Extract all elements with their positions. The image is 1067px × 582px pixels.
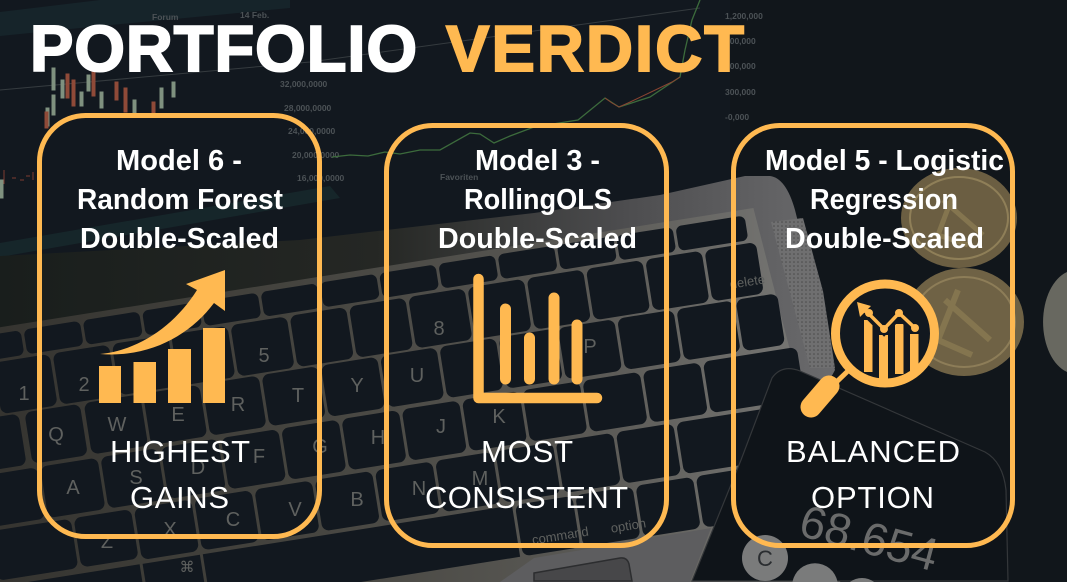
- trackpad: [534, 558, 632, 581]
- keyboard well: [0, 208, 846, 582]
- key letters: R: [231, 394, 245, 416]
- phone: [692, 369, 1008, 581]
- icon: bar chart with axes: [478, 279, 597, 398]
- heading: Model 6: Double-Scaled: [80, 223, 279, 255]
- key letters: U: [410, 365, 424, 387]
- key letters: Y: [350, 375, 364, 397]
- key letters: 5: [258, 345, 270, 367]
- heading: Model 6: Random Forest: [77, 184, 283, 216]
- heading: Model 5: [765, 145, 1004, 255]
- key letters: command: [531, 524, 590, 547]
- title: PORTFOLIO: [30, 12, 417, 85]
- key letters: S: [129, 467, 143, 489]
- calculator readout: 68.654: [794, 494, 944, 581]
- key letters: K: [492, 406, 506, 428]
- calculator buttons: [742, 535, 874, 582]
- label: balanced option: [786, 434, 960, 515]
- laptop speaker strip: [771, 218, 835, 368]
- label: most consistent: MOST: [481, 434, 573, 469]
- coins: [901, 168, 1067, 376]
- panel: Model 5 Logistic Regression: [734, 126, 1012, 546]
- label: highest gains: GAINS: [130, 480, 229, 515]
- key letters: Z: [101, 531, 113, 553]
- panel: Model 6 Random Forest: [40, 116, 320, 536]
- candlesticks: [0, 68, 175, 198]
- screen labels: 16,000,0000: [297, 173, 345, 183]
- card outline 2: [386, 126, 666, 546]
- label: highest gains: [110, 434, 250, 515]
- screen labels: 28,000,0000: [284, 103, 332, 113]
- line chart: [332, 0, 700, 157]
- screen labels: Forum: [152, 12, 179, 22]
- key letters: A: [66, 477, 80, 499]
- heading: Model 6: [77, 145, 283, 255]
- laptop body: [0, 176, 835, 582]
- heading: Model 3: [438, 145, 637, 255]
- screen labels: 300,000: [725, 87, 756, 97]
- screen labels: Favoriten: [440, 172, 478, 182]
- title: VERDICT: [446, 12, 744, 85]
- label: balanced option: BALANCED: [786, 434, 960, 469]
- key letters: W: [108, 414, 127, 436]
- screen labels: 24,000,0000: [288, 126, 336, 136]
- key letters: C: [226, 509, 240, 531]
- key letters: T: [292, 385, 304, 407]
- key letters: option: [610, 515, 647, 536]
- heading: Model 3: Model 3 -: [475, 145, 600, 177]
- screen labels: -0,000: [725, 112, 749, 122]
- card outline 3: [734, 126, 1012, 546]
- heading: Model 5: Regression: [810, 184, 958, 216]
- card outline 1: [40, 116, 320, 536]
- key letters: J: [436, 416, 446, 438]
- key letters: H: [371, 427, 385, 449]
- key letters: B: [350, 489, 364, 511]
- key letters: N: [412, 478, 426, 500]
- screen labels: 20,000,0000: [292, 150, 340, 160]
- screen labels: 1,200,000: [725, 11, 763, 21]
- key letters: 1: [18, 383, 30, 405]
- key letters: E: [171, 404, 185, 426]
- label: balanced option: OPTION: [811, 480, 934, 515]
- label: most consistent: [425, 434, 628, 515]
- heading: Model 3: RollingOLS: [464, 184, 612, 216]
- bottom row keys: [28, 505, 520, 582]
- key letters: M: [472, 468, 488, 490]
- screen labels: 14 Feb.: [240, 10, 269, 20]
- screen labels: 32,000,0000: [280, 79, 328, 89]
- key letters: G: [312, 436, 328, 458]
- heading: Model 6: Model 6 -: [116, 145, 242, 177]
- panel: Model 3 RollingOLS: [386, 126, 666, 546]
- heading: Model 5: Double-Scaled: [785, 223, 984, 255]
- key letters: ⌘: [180, 559, 194, 576]
- key letters: V: [288, 499, 302, 521]
- key letters: 8: [433, 318, 445, 340]
- key letters: 2: [78, 374, 90, 396]
- heading: Model 5: Model 5 - Logistic: [765, 145, 1004, 177]
- heading: Model 3: Double-Scaled: [438, 223, 637, 255]
- keyboard keys: [0, 215, 822, 582]
- key letters: F: [253, 446, 265, 468]
- icon: rising bars with arrow: [99, 270, 225, 403]
- laptop lower edge: [500, 528, 711, 582]
- screen labels: 900,000: [725, 36, 756, 46]
- title: [30, 12, 744, 85]
- key letters: D: [191, 457, 205, 479]
- screen labels: [152, 10, 763, 183]
- calculator buttons: C: [757, 546, 773, 571]
- key letters: Q: [48, 424, 64, 446]
- label: most consistent: CONSISTENT: [425, 480, 628, 515]
- key letters: P: [583, 336, 597, 358]
- key letters: [18, 271, 766, 576]
- key letters: X: [163, 519, 177, 541]
- icon: magnifying glass over chart: [811, 284, 934, 407]
- screen labels: 600,000: [725, 61, 756, 71]
- label: highest gains: HIGHEST: [110, 434, 250, 469]
- key letters: delete: [729, 271, 766, 292]
